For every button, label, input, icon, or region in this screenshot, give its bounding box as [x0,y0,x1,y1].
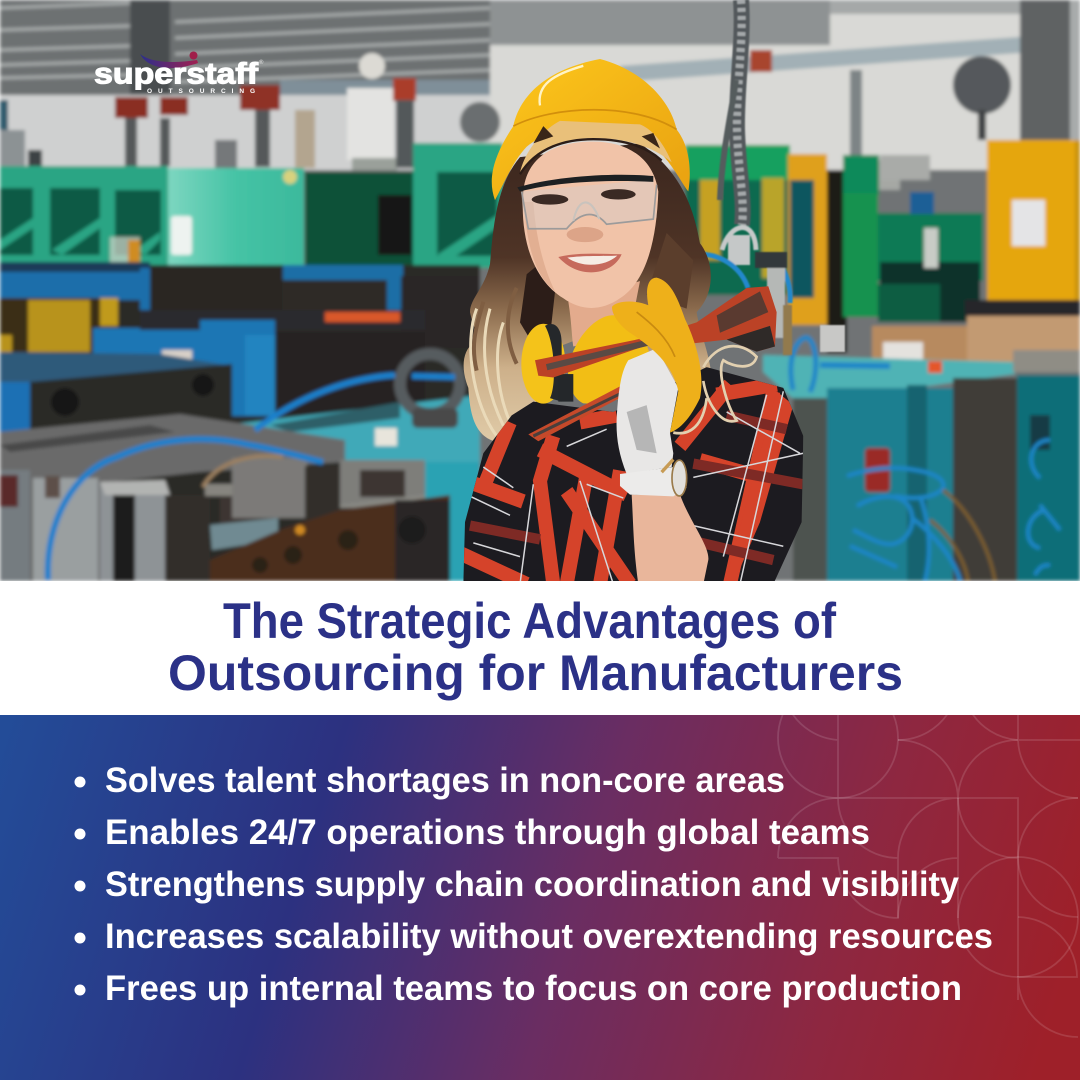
right teal blocks [763,355,1015,400]
neck [568,281,640,347]
glove [612,278,701,474]
helmet [492,59,690,200]
bullet 5: Frees up internal teams to focus on core production [105,969,962,1008]
arm [632,495,708,584]
loose hair on shoulder [673,346,757,433]
logo wordmark: superstaff [94,58,259,90]
ceiling [0,0,1080,98]
logo tagline: OUTSOURCING [147,88,255,95]
bullet 2: Enables 24/7 operations through global teams [105,813,870,852]
worker [463,59,804,581]
title line 2: Outsourcing for Manufacturers [168,645,903,701]
ring [400,354,460,414]
smile [558,227,622,272]
face [523,142,658,308]
bullet 4: Increases scalability without overextending resources [105,917,993,956]
photo: worker in factory [0,0,1080,588]
wristwatch [620,459,687,496]
teal mould plates [240,393,482,464]
title line 1: The Strategic Advantages of [223,593,836,649]
logo swoosh [140,54,198,68]
logo dot [190,52,198,60]
wall equipment [115,97,148,118]
grey moulds [0,414,345,581]
hanging cable and clamp [700,0,845,355]
bullet 1: Solves talent shortages in non-core areas [105,761,785,800]
hair [464,143,712,443]
hoses [255,375,455,430]
factory background [0,0,1080,581]
bullet 3: Strengthens supply chain coordination and visibility [105,865,960,904]
green machines left [0,166,168,268]
factory walls [0,95,500,170]
registered mark: ® [259,59,264,66]
green machines right [683,177,790,297]
pipe wrench [528,286,777,441]
left machinery [30,262,482,562]
safety glasses [517,175,657,229]
panel: benefits [0,678,1080,1080]
rusty block [210,495,450,581]
logo [94,52,264,95]
title band [0,581,1080,715]
earmuffs [521,315,650,404]
shirt [463,367,804,581]
benefits list [74,761,993,1008]
